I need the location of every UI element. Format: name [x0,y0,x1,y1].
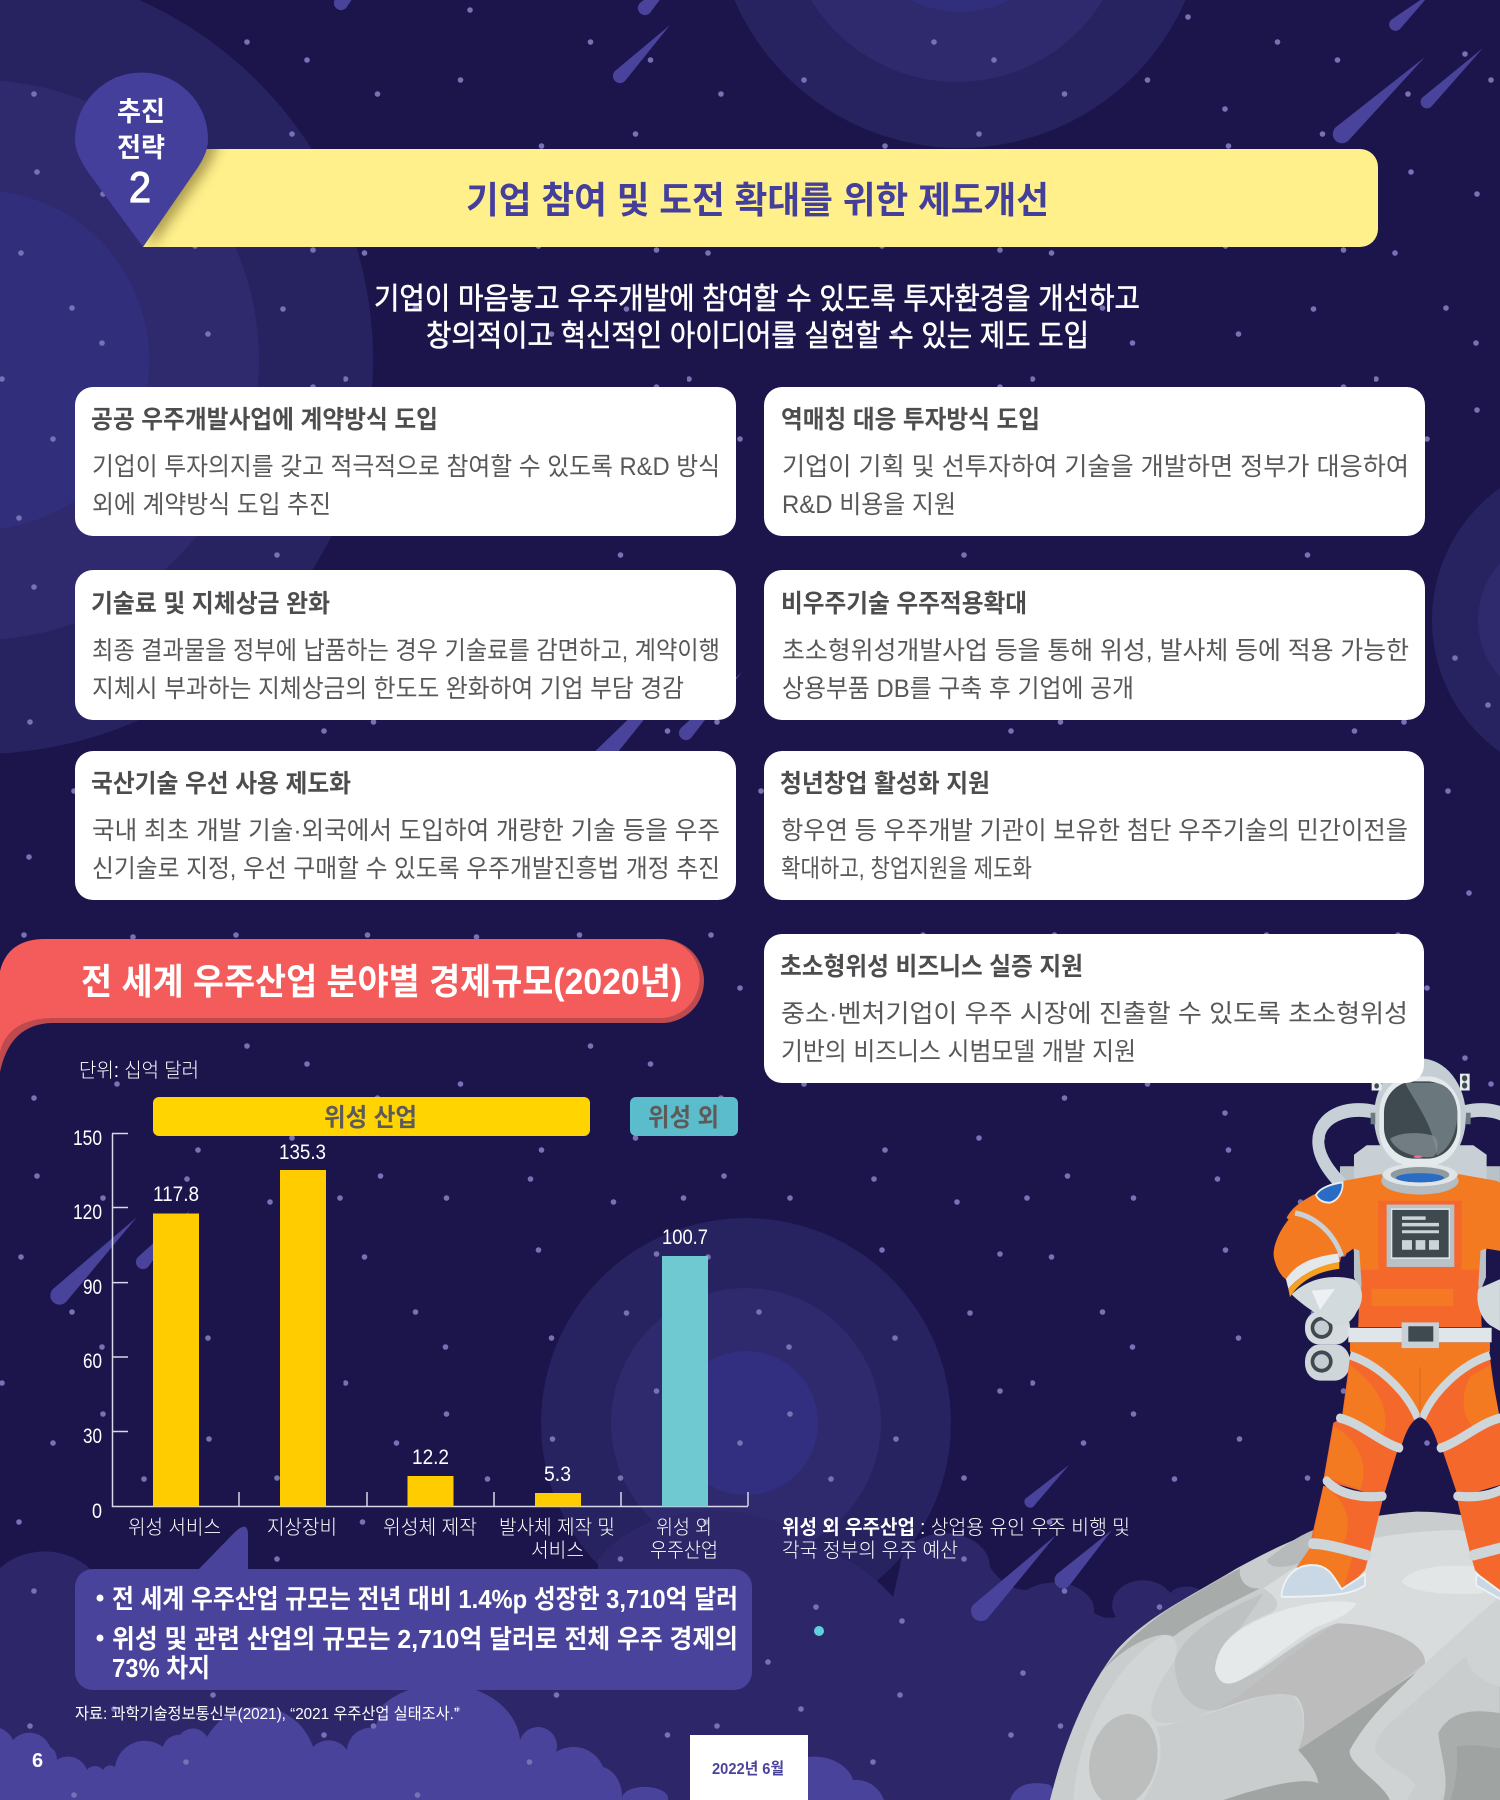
source: 자료: 과학기술정보통신부(2021), “2021 우주산업 실태조사.” [75,1705,459,1723]
planet: bottom center [541,1218,951,1628]
card: small satellite business: 초소형위성 비즈니스 실증 지원 [780,953,1083,981]
date tab: 2022년 6월 [712,1760,784,1778]
callout: 전 세계 우주산업 규모는 전년 대비 1.4%p 성장한 3,710억 달러 [112,1584,738,1614]
planet: right [1432,458,1500,782]
card: reverse matching: 기업이 기획 및 선투자하여 기술을 개발하면 정부가 대응하여 [782,453,1409,481]
card: youth startups [764,751,1424,900]
suit bands [1313,1418,1399,1555]
backpack [1340,1166,1500,1184]
card: contract method [75,387,736,536]
side strips [1354,1249,1362,1293]
category tag: satellite industry: 위성 산업 [324,1104,417,1132]
pin badge [75,73,208,247]
card: reverse matching [764,387,1425,536]
axes [112,1134,748,1506]
value labels [153,1141,708,1486]
pin shadow [144,149,224,247]
shoulder patch [1316,1182,1343,1203]
callout [75,1527,752,1690]
card: reverse matching: R&D 비용을 지원 [782,491,956,519]
y axis labels: 30 [83,1425,102,1448]
card: contract method: 공공 우주개발사업에 계약방식 도입 [91,406,438,434]
bars [153,1170,708,1506]
value labels: 117.8 [153,1183,199,1206]
pelvis [1350,1342,1490,1419]
card: contract method: 외에 계약방식 도입 추진 [92,491,331,519]
card: youth startups: 확대하고, 창업지원을 제도화 [781,855,1032,883]
y axis labels [73,1127,102,1523]
torso [1287,1174,1500,1327]
y axis labels: 60 [83,1350,102,1373]
x axis labels: 지상장비 [267,1516,337,1539]
cyan dot [814,1626,824,1636]
chest panel [1387,1205,1454,1267]
card: royalties: 최종 결과물을 정부에 납품하는 경우 기술료를 감면하고, 계약이행 [92,637,720,665]
y axis labels: 120 [73,1201,102,1224]
note: non-satellite space industry: 위성 외 우주산업 [782,1516,915,1539]
value labels: 135.3 [279,1141,326,1164]
x axis labels: 발사체 제작 및 [499,1516,615,1539]
left leg [1282,1358,1417,1597]
clouds: back layer [0,1511,1250,1800]
collar [1381,1163,1459,1195]
card: royalties: 기술료 및 지체상금 완화 [91,590,330,618]
unit label: 단위: 십억 달러 [79,1059,199,1082]
left glove [1292,1277,1362,1326]
x axis labels [128,1516,718,1562]
card: domestic technology: 신기술로 지정, 우선 구매할 수 있도록 우주개발진흥법 개정 추진 [92,855,720,883]
strategy heading bar [75,73,1378,250]
card: non-space technology: 초소형위성개발사업 등을 통해 위성, 발사체 등에 적용 가능한 [782,637,1409,665]
card: youth startups: 청년창업 활성화 지원 [780,770,990,798]
note: non-satellite space industry [782,1516,1130,1562]
category tag: non-satellite: 위성 외 [648,1104,719,1132]
bar chart [73,1059,748,1562]
card: non-space technology [764,570,1425,720]
value labels: 100.7 [662,1226,708,1249]
value labels: 5.3 [544,1463,571,1486]
pin badge: 추진 [117,97,165,127]
suit tubes [1318,1110,1375,1185]
page number: 6 [32,1750,43,1772]
card: domestic technology: 국산기술 우선 사용 제도화 [91,770,351,798]
subtitle [374,283,1140,353]
card: non-space technology: 상용부품 DB를 구축 후 기업에 공개 [782,675,1134,703]
chart title banner [0,939,704,1072]
left arm [1274,1212,1342,1281]
card: small satellite business [764,934,1424,1083]
x axis labels: 우주산업 [650,1539,718,1562]
jets [1305,1312,1350,1344]
subtitle: 기업이 마음놓고 우주개발에 참여할 수 있도록 투자환경을 개선하고 [374,283,1140,316]
y axis labels: 150 [73,1127,102,1150]
planet: top [714,0,1206,148]
x axis labels: 위성체 제작 [383,1516,477,1539]
chart title banner: 전 세계 우주산업 분야별 경제규모(2020년) [81,961,682,1002]
helmet [1371,1074,1471,1166]
card: small satellite business: 중소·벤처기업이 우주 시장에 진출할 수 있도록 초소형위성 [781,1000,1408,1028]
right leg [1423,1358,1500,1599]
card: youth startups: 항우연 등 우주개발 기관이 보유한 첨단 우주기술의 민간이전을 [781,817,1408,845]
note: non-satellite space industry: 각국 정부의 우주 예산 [782,1539,958,1562]
clouds: front layer [0,1684,1060,1800]
card: small satellite business: 기반의 비즈니스 시범모델 개발 지원 [781,1038,1136,1066]
category tag: non-satellite [630,1097,738,1136]
value labels: 12.2 [412,1446,449,1469]
belt [1348,1322,1492,1348]
note: non-satellite space industry: : 상업용 유인 우주 비행 및 [920,1516,1130,1539]
callout: 위성 및 관련 산업의 규모는 2,710억 달러로 전체 우주 경제의 [112,1624,738,1654]
x axis labels: 위성 서비스 [128,1516,221,1539]
illustration: moon [1050,1512,1500,1800]
right glove [1477,1279,1500,1331]
subtitle: 창의적이고 혁신적인 아이디어를 실현할 수 있는 제도 도입 [426,320,1089,353]
boot [1282,1565,1365,1597]
card: royalties [75,570,736,720]
y axis labels: 0 [92,1500,102,1523]
x axis labels: 서비스 [531,1539,584,1562]
illustration: astronaut [1274,1058,1500,1599]
yellow banner [143,149,1378,247]
card: reverse matching: 역매칭 대응 투자방식 도입 [781,406,1040,434]
planet: left [0,0,373,754]
heading text: 기업 참여 및 도전 확대를 위한 제도개선 [466,180,1049,221]
y axis labels: 90 [83,1276,102,1299]
pin badge: 전략 [117,133,165,163]
card: contract method: 기업이 투자의지를 갖고 적극적으로 참여할 수 있도록 R&D 방식 [92,453,720,481]
card: royalties: 지체시 부과하는 지체상금의 한도도 완화하여 기업 부담 경감 [92,675,684,703]
callout: 73% 차지 [112,1653,210,1683]
card: domestic technology [75,751,736,900]
date tab [690,1735,808,1800]
card: non-space technology: 비우주기술 우주적용확대 [781,590,1027,618]
card: domestic technology: 국내 최초 개발 기술·외국에서 도입하여 개량한 기술 등을 우주 [92,817,720,845]
pin badge: 2 [129,164,151,212]
helmet back [1374,1058,1466,1175]
category tag: satellite industry [153,1097,590,1136]
x axis labels: 위성 외 [656,1516,712,1539]
